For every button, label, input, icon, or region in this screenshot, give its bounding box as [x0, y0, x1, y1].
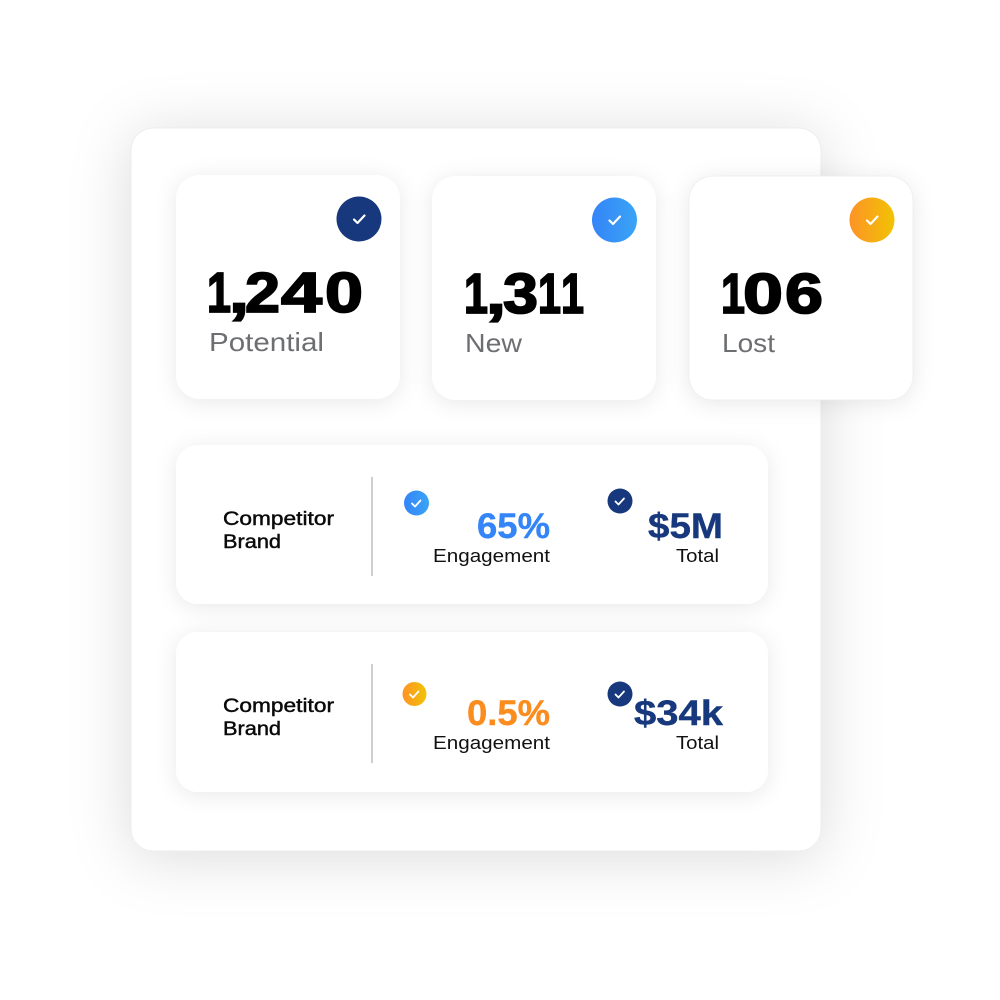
brand name: Competitor: [223, 509, 335, 530]
number: 1,240: 2: [245, 261, 280, 325]
icon: blue check: [404, 490, 429, 516]
label: Total: Total: [676, 733, 719, 753]
card: competitor row 2: [176, 632, 768, 792]
number: 1,240: ,: [229, 261, 249, 325]
icon: orange check badge: [850, 198, 894, 242]
number: 1,311: ,: [486, 262, 506, 326]
label: Potential: Potential: [209, 327, 324, 357]
number: 1,311: 1: [538, 262, 561, 326]
number: 1,240: 4: [281, 261, 322, 325]
number: 1,311: 3: [503, 262, 538, 326]
card: new: [432, 176, 656, 400]
brand name: Brand: [223, 532, 281, 553]
icon: navy check: [608, 682, 632, 706]
card: lost: [689, 176, 913, 400]
icon: blue check badge: [592, 198, 637, 242]
number: 1,240: 1: [207, 261, 231, 325]
label: Engagement: Engagement: [433, 733, 550, 753]
card: competitor row 1: [176, 445, 768, 604]
brand name: Brand: [223, 719, 281, 740]
brand name: Competitor: [223, 696, 335, 717]
card: potential: [176, 175, 400, 399]
panel: main dashboard: [131, 128, 821, 851]
icon: navy check badge: [336, 196, 382, 242]
icon: navy check: [608, 488, 632, 514]
label: Total: Total: [676, 546, 719, 566]
metric: $34k: $34k: [634, 694, 724, 733]
label: Engagement: Engagement: [433, 546, 550, 566]
label: New: New: [465, 328, 522, 358]
number: 1,311: 1: [561, 262, 584, 326]
number: 106: 6: [785, 262, 823, 326]
number: 1,311: 1: [464, 262, 488, 326]
metric: $5M: $5M: [648, 507, 723, 546]
number: 1,240: 0: [325, 261, 363, 325]
number: 106: 0: [743, 262, 783, 326]
number: 106: 1: [721, 262, 745, 326]
label: Lost: Lost: [722, 328, 776, 358]
icon: orange check: [402, 682, 426, 706]
metric: 0.5%: 0.5%: [467, 694, 550, 733]
metric: 65%: 65%: [477, 507, 550, 546]
